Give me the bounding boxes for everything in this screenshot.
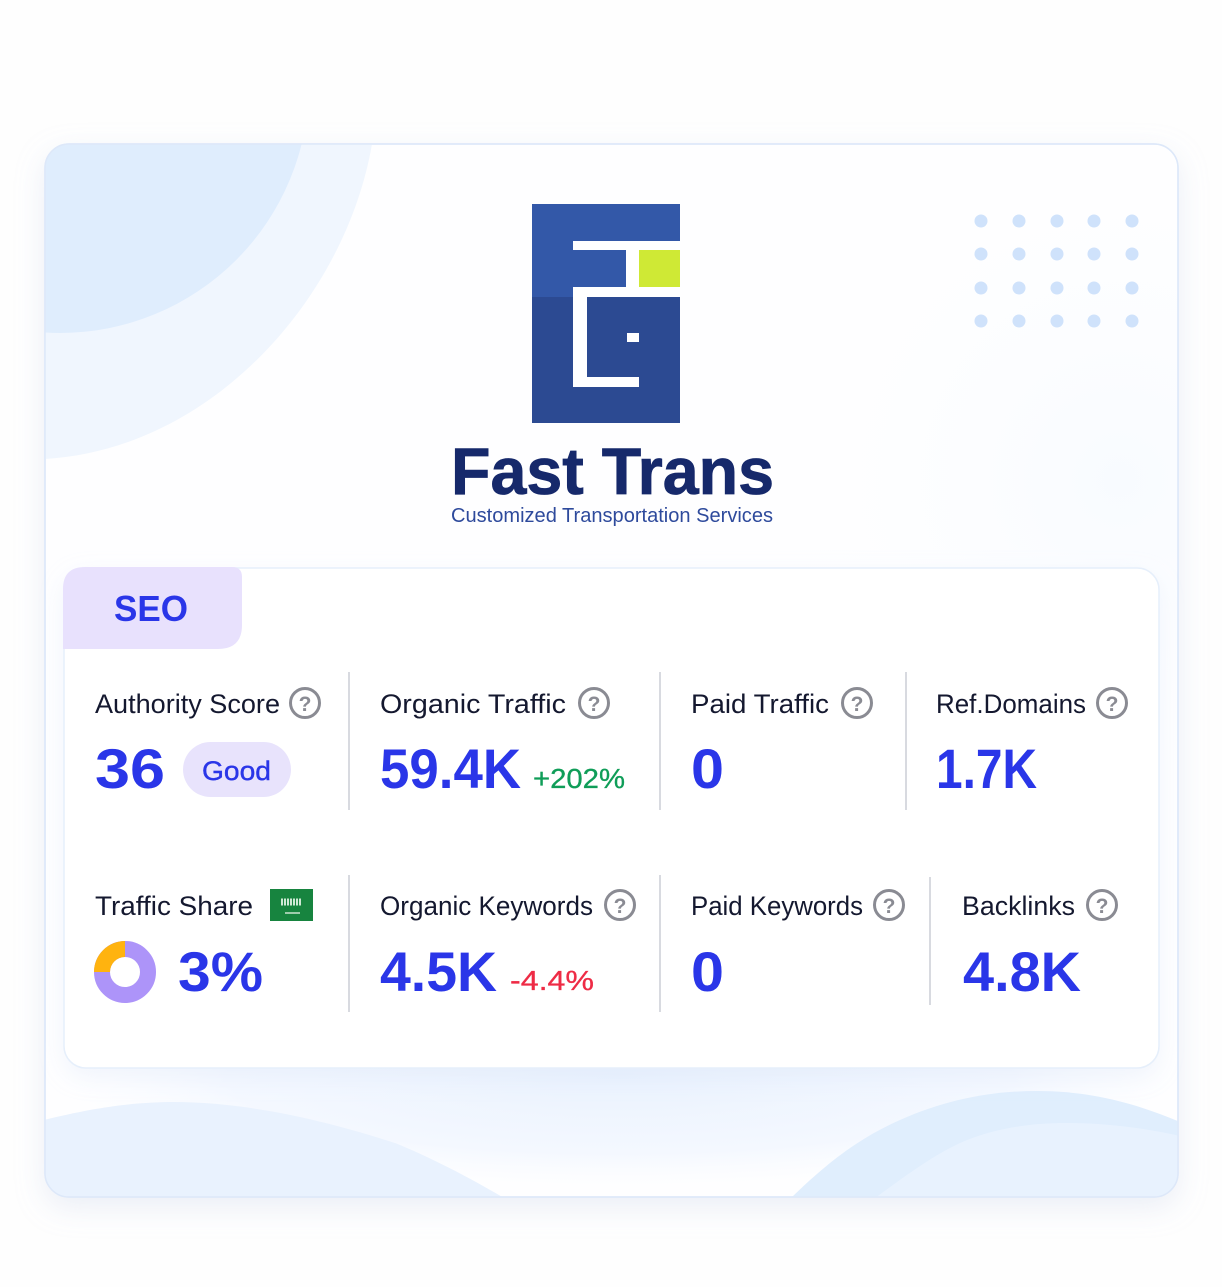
metric: Authority Score: 36 (95, 737, 165, 800)
metric: Organic Traffic: ? (588, 693, 600, 716)
metric: Organic Keywords: Organic Keywords (380, 891, 593, 921)
tab: SEO: SEO (114, 588, 188, 629)
metric: Paid Traffic: 0 (691, 737, 724, 800)
decoration: outer corner arc (44, 144, 372, 459)
metric: Organic Keywords: -4.4% (510, 965, 594, 996)
metric: Paid Traffic: Paid Traffic (691, 689, 829, 719)
metric: Paid Traffic: ? (851, 693, 863, 716)
metric: Backlinks: 4.8K (963, 940, 1081, 1003)
badge: Good: Good (202, 756, 271, 786)
metric: Organic Keywords (380, 890, 634, 1003)
metric: Paid Keywords: ? (883, 895, 895, 918)
icon: traffic share donut (94, 941, 148, 995)
metric: Organic Traffic: +202% (533, 763, 625, 794)
metric: Paid Keywords: 0 (691, 940, 724, 1003)
metric: Organic Traffic (380, 688, 625, 800)
metric: Backlinks: ? (1096, 895, 1108, 918)
logo tagline: Customized Transportation Services (451, 505, 773, 527)
decoration: bottom left wave (44, 1102, 504, 1198)
metric: Ref.Domains: 1.7K (936, 737, 1037, 800)
icon: Saudi flag (270, 889, 313, 921)
metric: Authority Score: Authority Score (95, 689, 280, 719)
metric: Backlinks: Backlinks (962, 891, 1075, 921)
metric: Backlinks (962, 890, 1116, 1003)
tab: SEO (63, 567, 242, 649)
metric: Authority Score (95, 688, 320, 800)
metric: Ref.Domains: Ref.Domains (936, 689, 1086, 719)
metric: Paid Traffic (691, 688, 872, 800)
decoration: bottom right inner wave (875, 1123, 1180, 1198)
panel: brand card (42, 143, 1180, 1210)
metric: Paid Keywords: Paid Keywords (691, 891, 863, 921)
dot grid (974, 214, 1138, 328)
logo wordmark: Fast Trans (451, 434, 774, 508)
metric: Organic Traffic: Organic Traffic (380, 689, 566, 719)
metric: Paid Keywords (691, 890, 904, 1003)
badge: Good (183, 742, 291, 797)
panel: SEO metrics (63, 567, 1159, 1068)
metric: Ref.Domains: ? (1106, 693, 1118, 716)
metric: Organic Traffic: 59.4K (380, 737, 521, 800)
metric: Traffic Share (94, 889, 313, 1003)
decoration: inner corner circle (46, 144, 302, 333)
icon: Fast Trans logo mark (532, 204, 680, 423)
decoration: bottom right wave (791, 1091, 1180, 1198)
metric: Traffic Share: Traffic Share (95, 891, 253, 921)
metric: Organic Keywords: ? (614, 895, 626, 918)
metric: Ref.Domains (936, 688, 1126, 800)
metric: Authority Score: ? (299, 693, 311, 716)
metric: Traffic Share: 3% (178, 940, 263, 1003)
metric: Organic Keywords: 4.5K (380, 940, 497, 1003)
